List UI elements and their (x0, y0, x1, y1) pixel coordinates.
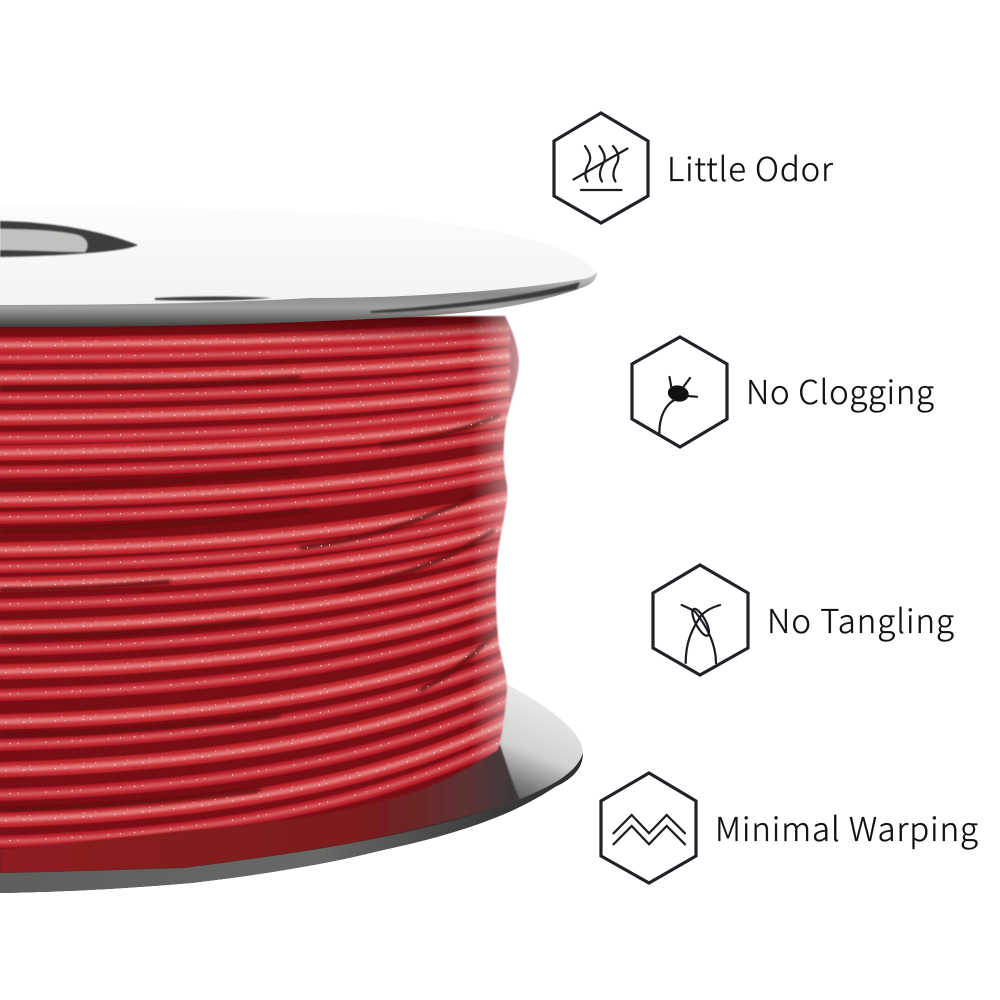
hexagon icon: little odor (554, 113, 648, 223)
spool centre hole (0, 221, 138, 257)
feature: No Clogging (632, 337, 934, 447)
feature: Little Odor (554, 113, 833, 223)
lower flange (0, 683, 583, 893)
hexagon icon: no clogging (632, 337, 727, 447)
label: Minimal Warping: Minimal Warping (715, 803, 978, 851)
label: No Tangling: No Tangling (767, 595, 954, 643)
filament windings (0, 300, 540, 870)
glitter sparkles (0, 325, 510, 841)
hexagon icon: no tangling (653, 565, 748, 675)
feature: Minimal Warping (601, 773, 978, 883)
feature: No Tangling (653, 565, 954, 675)
upper flange rim (0, 272, 597, 327)
dark gaps between windings (0, 378, 500, 810)
upper flange top surface (0, 203, 597, 305)
label: No Clogging: No Clogging (746, 366, 934, 414)
hexagon icon: minimal warping (601, 773, 696, 883)
rim shadow streak (155, 282, 580, 313)
label: Little Odor: Little Odor (667, 143, 833, 191)
filament spool photo (0, 203, 597, 893)
